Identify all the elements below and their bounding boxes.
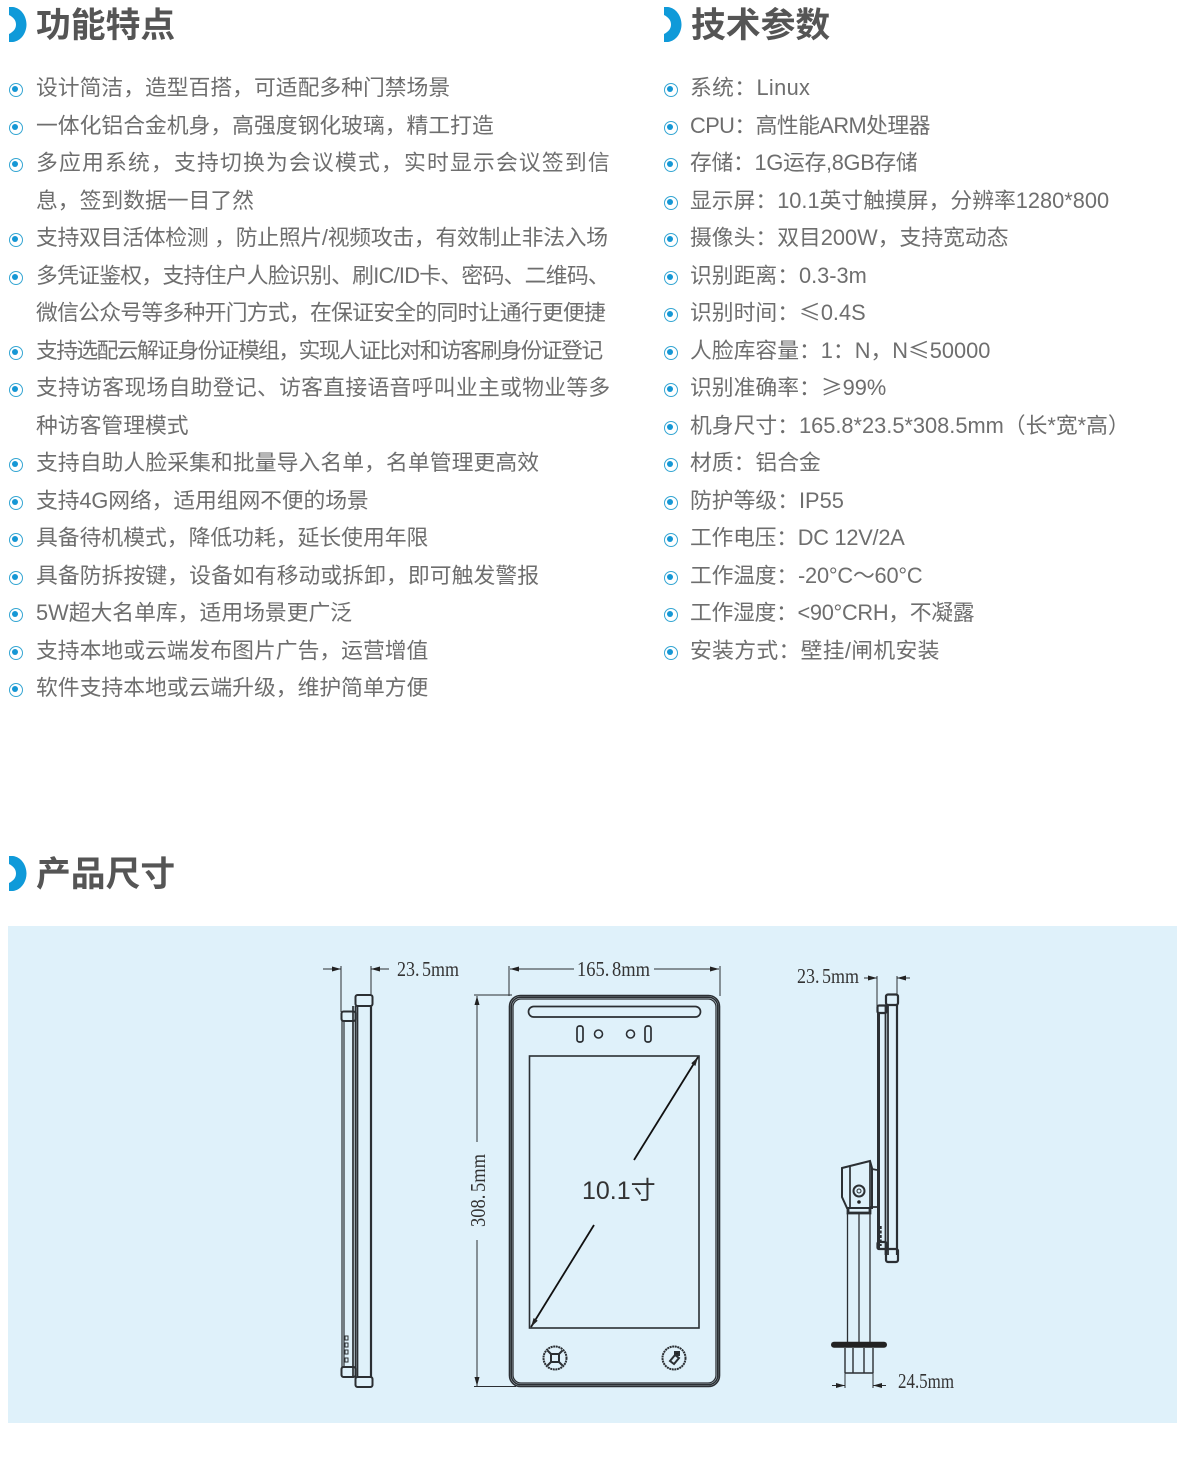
heading: product dimensions: 产品尺寸 <box>36 855 175 894</box>
panel: dimension drawings <box>8 926 1177 1423</box>
feature item 9: 支持4G网络，适用组网不便的场景 <box>36 488 369 512</box>
spec: face capacity: 人脸库容量：1：N，N≤50000 <box>690 334 990 364</box>
feature item 1: 设计简洁，造型百搭，可适配多种门禁场景 <box>36 75 450 100</box>
icon: right button <box>662 1346 686 1370</box>
label: width: 165.8mm <box>577 957 650 981</box>
feature item 10: 具备待机模式，降低功耗，延长使用年限 <box>36 525 428 550</box>
front view <box>466 957 720 1386</box>
feature item 13: 支持本地或云端发布图片广告，运营增值 <box>36 638 428 662</box>
feature item 4: 支持双目活体检测 ，防止照片/视频攻击，有效制止非法入场 <box>36 225 608 250</box>
spec: material: 材质：铝合金 <box>690 450 821 475</box>
spec: system: 系统：Linux <box>690 75 810 100</box>
label: right depth: 23.5mm <box>797 964 859 988</box>
left side view <box>323 957 459 1387</box>
diagram: dimension drawings <box>323 957 954 1393</box>
feature item 5 <box>9 262 609 325</box>
icon: specs heading marker <box>664 7 682 42</box>
right side view with stand <box>797 964 954 1393</box>
label: left depth: 23.5mm <box>397 957 459 981</box>
spec: voltage: 工作电压：DC 12V/2A <box>690 525 905 550</box>
spec: humidity: 工作湿度：<90°CRH，不凝露 <box>690 600 974 625</box>
spec list <box>664 75 1130 662</box>
feature item 3: 多应用系统，支持切换为会议模式，实时显示会议签到信 <box>36 150 611 175</box>
spec: recognition distance: 识别距离：0.3-3m <box>690 262 867 288</box>
spec: protection: 防护等级：IP55 <box>690 488 844 512</box>
feature item 8: 支持自助人脸采集和批量导入名单，名单管理更高效 <box>36 450 539 475</box>
heading: technical parameters: 技术参数 <box>691 6 830 45</box>
icon: dimensions heading marker <box>9 856 26 891</box>
icon: features heading marker <box>9 7 26 42</box>
feature item 11: 具备防拆按键，设备如有移动或拆卸，即可触发警报 <box>36 562 539 588</box>
label: stand width: 24.5mm <box>898 1369 954 1393</box>
spec: storage: 存储：1G运存,8GB存储 <box>690 150 917 175</box>
feature item 7 <box>9 375 611 438</box>
spec: recognition time: 识别时间：≤0.4S <box>690 296 866 327</box>
feature item 3: 息，签到数据一目了然 <box>36 188 254 212</box>
spec: accuracy: 识别准确率：≥99% <box>690 371 886 402</box>
spec: temperature: 工作温度：-20°C～60°C <box>690 562 922 588</box>
feature item 14: 软件支持本地或云端升级，维护简单方便 <box>36 675 428 700</box>
feature item 7: 种访客管理模式 <box>36 412 189 438</box>
feature item 5: 微信公众号等多种开门方式，在保证安全的同时让通行更便捷 <box>36 300 605 325</box>
feature item 3 <box>9 150 611 212</box>
feature list <box>9 75 611 700</box>
spec: camera: 摄像头：双目200W，支持宽动态 <box>690 225 1009 250</box>
label: screen size: 10.1寸 <box>582 1177 656 1205</box>
spec: display: 显示屏：10.1英寸触摸屏，分辨率1280*800 <box>690 188 1109 212</box>
icon: left button <box>544 1346 566 1370</box>
feature item 5: 多凭证鉴权，支持住户人脸识别、刷IC/ID卡、密码、二维码、 <box>36 262 609 288</box>
spec: installation: 安装方式：壁挂/闸机安装 <box>690 638 940 662</box>
heading: features: 功能特点 <box>36 6 175 45</box>
feature item 6: 支持选配云解证身份证模组，实现人证比对和访客刷身份证登记 <box>36 338 602 362</box>
spec: cpu: CPU：高性能ARM处理器 <box>690 112 930 138</box>
feature item 7: 支持访客现场自助登记、访客直接语音呼叫业主或物业等多 <box>36 375 611 400</box>
feature item 12: 5W超大名单库，适用场景更广泛 <box>36 600 352 625</box>
feature item 2: 一体化铝合金机身，高强度钢化玻璃，精工打造 <box>36 112 494 138</box>
spec: body size: 机身尺寸：165.8*23.5*308.5mm（长*宽*高） <box>690 412 1130 438</box>
label: height: 308.5mm <box>466 1154 490 1227</box>
